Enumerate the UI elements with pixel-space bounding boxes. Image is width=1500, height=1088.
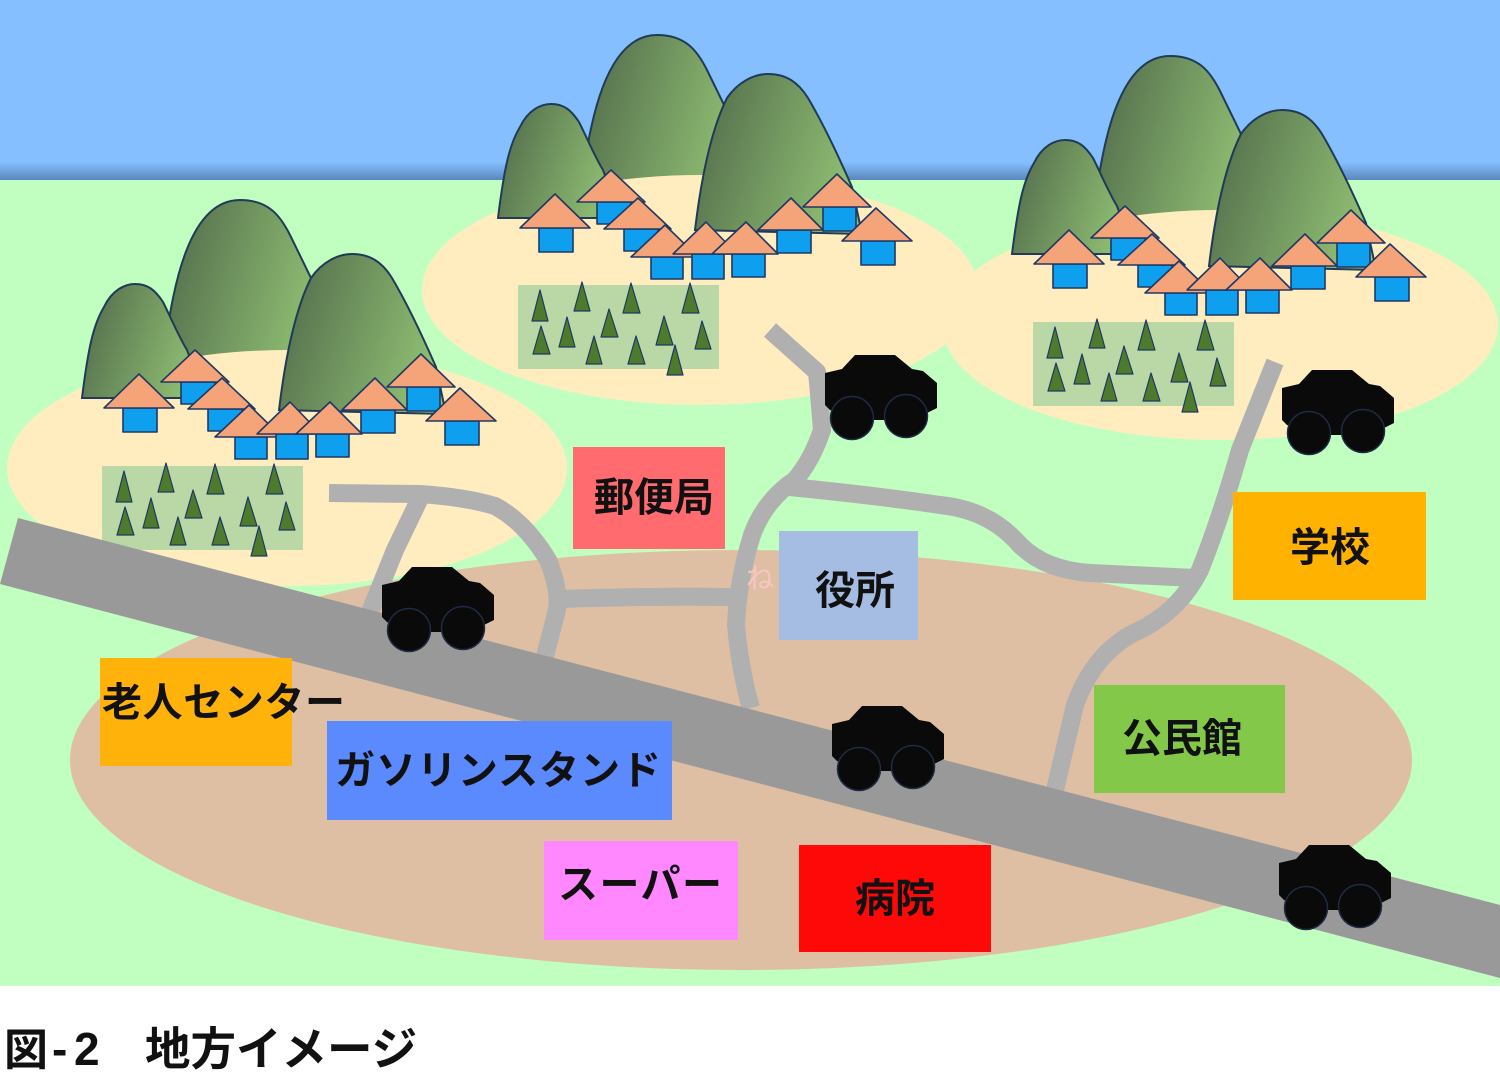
- mountains: village 1: [82, 254, 446, 414]
- side roads: [329, 330, 1275, 790]
- building: hospital: [799, 845, 991, 952]
- car: centre village: [825, 355, 937, 440]
- car: highway left: [382, 567, 494, 652]
- back mountain: village 3: [1095, 56, 1255, 231]
- forest: village 3: [1033, 319, 1234, 412]
- building: supermarket: スーパー: [558, 863, 722, 907]
- building: community hall: [1094, 685, 1285, 793]
- building: post office: [573, 447, 725, 549]
- building: hospital: 病院: [855, 877, 935, 921]
- mountains: village 2: [498, 74, 862, 234]
- faint handwritten mark: ね: [746, 563, 774, 594]
- car: highway right: [1279, 845, 1391, 930]
- ground: [0, 170, 1500, 986]
- building: school: [1233, 492, 1426, 600]
- caption: -: [52, 1023, 67, 1075]
- building: gas station: [327, 721, 672, 820]
- village land: centre: [422, 175, 978, 405]
- houses: village 1: [104, 350, 496, 459]
- houses: village 3: [1034, 206, 1426, 315]
- town area: [70, 550, 1412, 970]
- back mountain: village 2: [582, 35, 742, 210]
- building: town hall: [779, 531, 918, 640]
- car: right village: [1282, 370, 1394, 454]
- village land: right: [942, 210, 1498, 440]
- back mountain: village 1: [165, 200, 325, 375]
- building: senior center: [100, 658, 345, 766]
- building: community hall: 公民館: [1122, 717, 1242, 761]
- caption: 地方イメージ: [145, 1024, 417, 1075]
- caption: 2: [74, 1023, 100, 1075]
- forest: village 2: [518, 282, 719, 375]
- village land: left: [7, 350, 567, 586]
- houses: village 2: [520, 170, 912, 279]
- sky: [0, 0, 1500, 180]
- building: gas station: ガソリンスタンド: [335, 749, 661, 793]
- building: school: 学校: [1290, 526, 1370, 570]
- caption: 図: [4, 1026, 48, 1075]
- building: supermarket: [544, 841, 738, 940]
- car: highway centre: [832, 706, 944, 790]
- building: senior center: 老人センター: [102, 681, 345, 725]
- mountains: village 3: [1012, 110, 1376, 270]
- forest: village 1: [102, 463, 303, 556]
- main highway: [0, 518, 1500, 978]
- building: post office: 郵便局: [594, 476, 714, 520]
- building: town hall: 役所: [815, 569, 895, 613]
